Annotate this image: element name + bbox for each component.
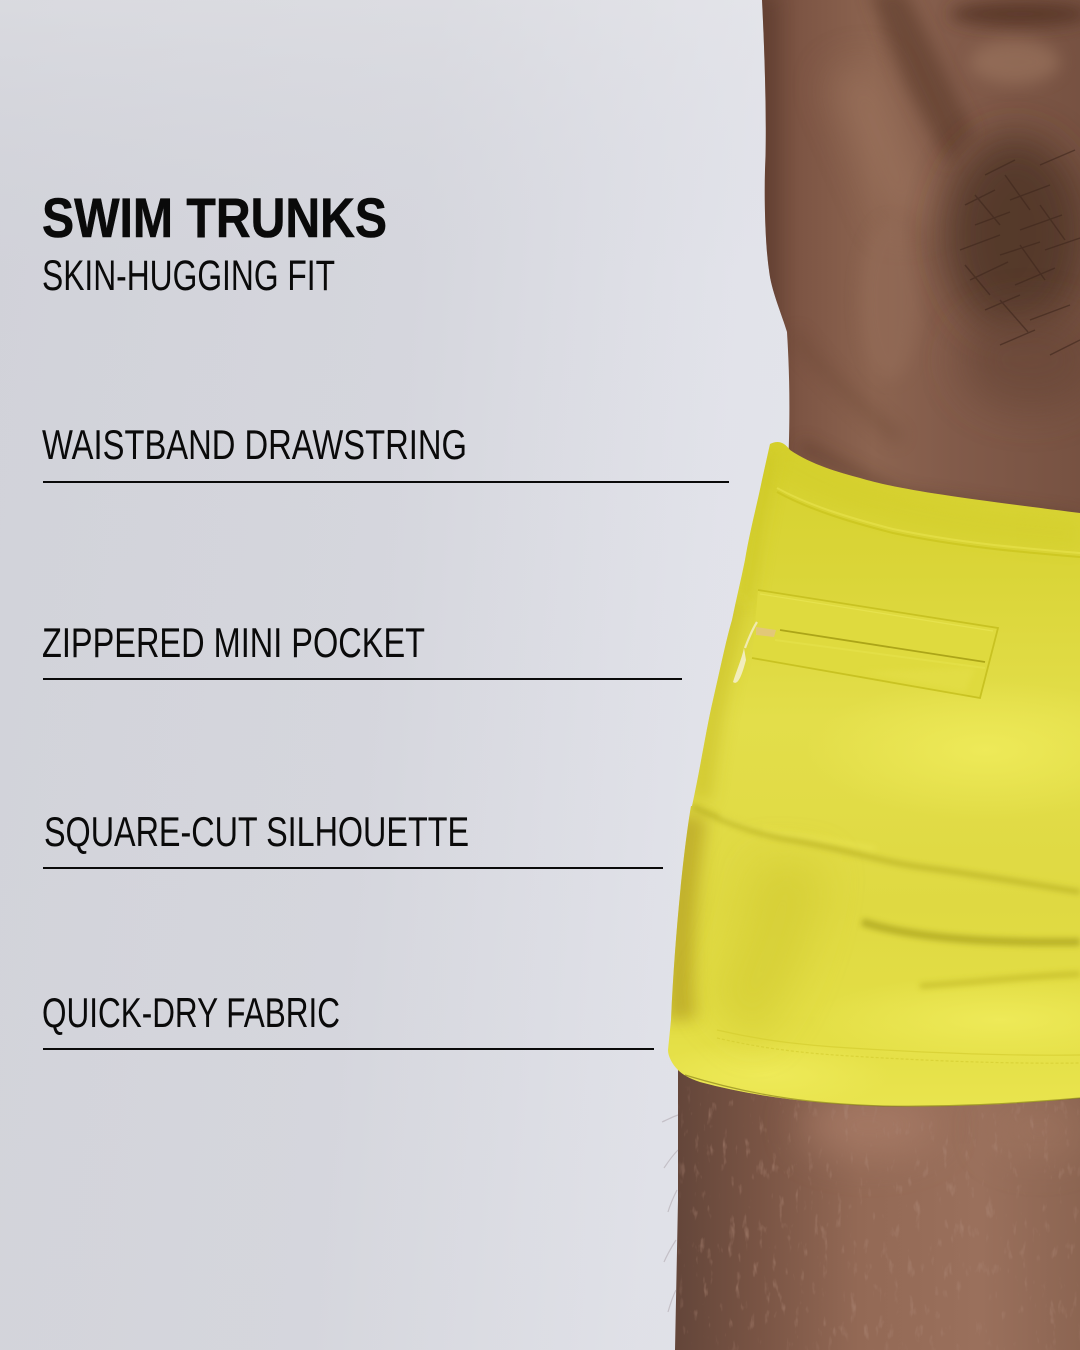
photo: model torso <box>755 0 1080 545</box>
leg hair on outline <box>662 1115 678 1312</box>
callout: zippered mini pocket: ZIPPERED MINI POCKET <box>42 619 425 666</box>
waistband shading <box>786 446 788 447</box>
waistband seam <box>777 492 1080 557</box>
chest hair strokes <box>960 150 1080 355</box>
title: SWIM TRUNKS <box>42 186 387 249</box>
photo: yellow square-cut swim trunks <box>650 442 1080 1110</box>
title <box>42 186 387 300</box>
photo: model leg <box>662 1060 1080 1350</box>
zippered mini pocket <box>733 590 998 698</box>
icon: zipper pull <box>733 622 776 683</box>
callout: square-cut silhouette: SQUARE-CUT SILHOUETTE <box>44 808 469 855</box>
callout: quick-dry fabric: QUICK-DRY FABRIC <box>42 989 340 1036</box>
callout: waistband drawstring: WAISTBAND DRAWSTRING <box>42 421 467 468</box>
fabric creases <box>692 806 1080 892</box>
hem shadow line <box>685 1075 1080 1106</box>
hem seam <box>717 1030 1080 1055</box>
subtitle: SKIN-HUGGING FIT <box>42 252 335 300</box>
